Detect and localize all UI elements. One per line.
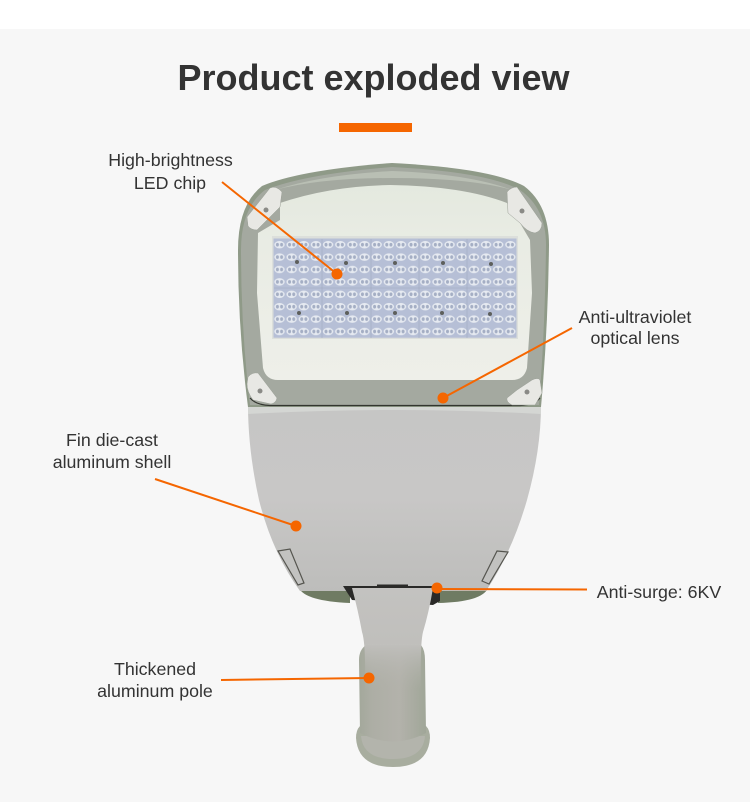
callout: optical lens: optical lens [591,328,680,348]
callout: aluminum pole: aluminum pole [97,681,213,701]
callout: aluminum shell [53,430,302,532]
street lamp illustration [238,163,549,767]
body top rim [248,405,541,414]
upper frame highlight [275,171,512,190]
callout: LED chip: High-brightness [108,150,233,170]
callout: LED chip: LED chip [134,173,206,193]
title: Product exploded view [177,57,571,98]
callout: aluminum shell: Fin die-cast [66,430,158,450]
mounting clips [247,187,542,405]
callout: optical lens: Anti-ultraviolet [579,307,691,327]
callout: aluminum pole [97,659,374,701]
side clips [278,549,508,585]
callout: LED chip [108,150,342,280]
callout: optical lens [438,307,691,404]
LED array [272,236,518,339]
callout: aluminum shell: aluminum shell [53,452,171,472]
callout: aluminum pole: Thickened [114,659,196,679]
inner reflector panel [257,185,532,380]
neck [352,588,433,690]
callout: anti-surge: Anti-surge: 6KV [597,582,721,602]
callout: anti-surge [432,582,721,602]
lamp pole [356,645,430,767]
lower aluminum body [248,405,541,591]
green underside [299,586,488,603]
lens bottom edge [250,398,540,406]
title accent bar [339,123,412,132]
dark junction [343,584,440,605]
lens housing [238,163,549,407]
